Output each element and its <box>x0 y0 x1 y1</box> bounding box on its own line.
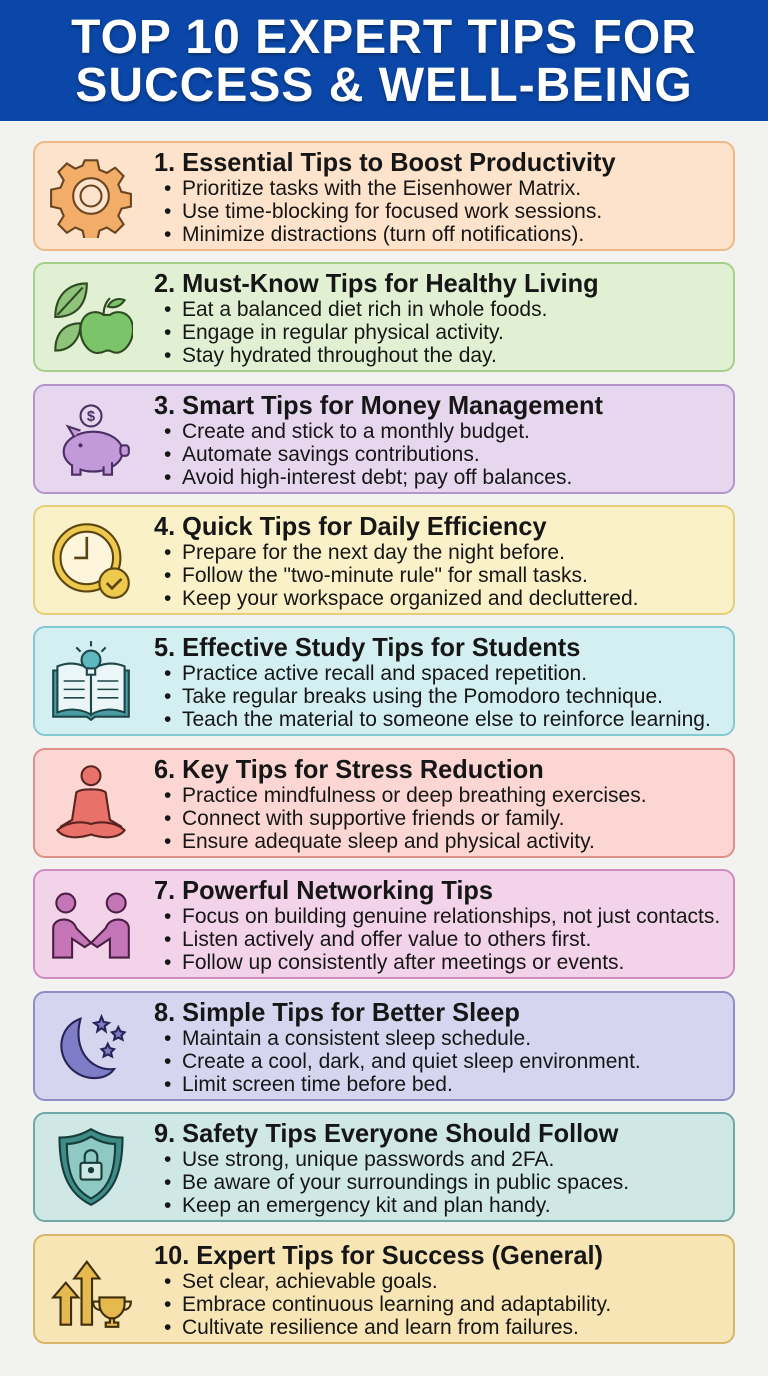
text: efficiency: • <box>164 541 171 564</box>
text: study: Take regular breaks using the Pomodoro technique. <box>182 685 663 708</box>
icon: clock with check <box>52 523 130 599</box>
text: efficiency: • <box>164 587 171 610</box>
text: money: 3. Smart Tips for Money Management <box>154 390 603 420</box>
text: sleep: Limit screen time before bed. <box>182 1073 453 1096</box>
text: efficiency <box>154 511 638 610</box>
text: healthy living: • <box>164 298 171 321</box>
text: networking: Focus on building genuine relationships, not just contacts. <box>182 905 720 928</box>
text: money: • <box>164 420 171 443</box>
panel: efficiency <box>33 505 735 615</box>
panel: safety <box>33 1112 735 1222</box>
panel: money <box>33 384 735 494</box>
text: study: 5. Effective Study Tips for Students <box>154 632 580 662</box>
panel: study <box>33 626 735 736</box>
panel: healthy living <box>33 262 735 372</box>
icon: piggy bank <box>62 404 130 476</box>
text: money <box>154 390 603 489</box>
text: stress: • <box>164 830 171 853</box>
icon: handshake people <box>52 892 130 959</box>
text: success: Set clear, achievable goals. <box>182 1270 438 1293</box>
text: safety: Use strong, unique passwords and 2FA. <box>182 1148 554 1171</box>
text: stress: Practice mindfulness or deep breathing exercises. <box>182 784 647 807</box>
text: efficiency: 4. Quick Tips for Daily Efficiency <box>154 511 547 541</box>
header: SUCCESS & WELL-BEING <box>75 59 693 112</box>
text: success: • <box>164 1270 171 1293</box>
text: safety: • <box>164 1171 171 1194</box>
text: efficiency: Follow the "two-minute rule" for small tasks. <box>182 564 588 587</box>
text: success: • <box>164 1293 171 1316</box>
text: productivity: Minimize distractions (turn off notifications). <box>182 223 584 246</box>
text: networking: Follow up consistently after meetings or events. <box>182 951 624 974</box>
text: stress: Ensure adequate sleep and physical activity. <box>182 830 595 853</box>
text: stress: 6. Key Tips for Stress Reduction <box>154 754 544 784</box>
text: sleep <box>154 997 641 1096</box>
panel: productivity <box>33 141 735 251</box>
icon: moon and stars <box>60 1014 127 1080</box>
text: healthy living: 2. Must-Know Tips for Healthy Living <box>154 268 599 298</box>
text: healthy living: Eat a balanced diet rich in whole foods. <box>182 298 547 321</box>
text: productivity: 1. Essential Tips to Boost Productivity <box>154 147 616 177</box>
text: healthy living: Stay hydrated throughout the day. <box>182 344 497 367</box>
text: safety: 9. Safety Tips Everyone Should Follow <box>154 1118 618 1148</box>
icon: apple and leaf <box>54 282 133 354</box>
text: sleep: Maintain a consistent sleep schedule. <box>182 1027 531 1050</box>
text: success: • <box>164 1316 171 1339</box>
text: productivity: • <box>164 223 171 246</box>
text: productivity: • <box>164 177 171 200</box>
text: safety <box>154 1118 629 1217</box>
text: productivity: • <box>164 200 171 223</box>
text: success <box>154 1240 611 1339</box>
text: productivity: Use time-blocking for focused work sessions. <box>182 200 602 223</box>
text: stress: • <box>164 807 171 830</box>
text: networking: • <box>164 905 171 928</box>
icon: gear <box>50 159 132 238</box>
text: productivity <box>154 147 616 246</box>
text: sleep: 8. Simple Tips for Better Sleep <box>154 997 520 1027</box>
text: stress: • <box>164 784 171 807</box>
text: study: Practice active recall and spaced repetition. <box>182 662 587 685</box>
text: healthy living <box>154 268 599 367</box>
text: success: Embrace continuous learning and adaptability. <box>182 1293 611 1316</box>
text: healthy living: • <box>164 344 171 367</box>
text: efficiency: Keep your workspace organized and decluttered. <box>182 587 638 610</box>
text: study <box>154 632 711 731</box>
panel: stress <box>33 748 735 858</box>
header: TOP 10 EXPERT TIPS FOR <box>71 11 697 64</box>
text: stress: Connect with supportive friends or family. <box>182 807 564 830</box>
text: sleep: • <box>164 1027 171 1050</box>
text: productivity: Prioritize tasks with the Eisenhower Matrix. <box>182 177 581 200</box>
header <box>0 0 768 121</box>
text: sleep: Create a cool, dark, and quiet sleep environment. <box>182 1050 641 1073</box>
text: networking: Listen actively and offer value to others first. <box>182 928 591 951</box>
text: stress <box>154 754 647 853</box>
text: success: 10. Expert Tips for Success (General) <box>154 1240 603 1270</box>
text: study: Teach the material to someone else to reinforce learning. <box>182 708 711 731</box>
text: safety: • <box>164 1194 171 1217</box>
panel: success <box>33 1234 735 1344</box>
text: money: • <box>164 443 171 466</box>
panel: networking <box>33 869 735 979</box>
text: networking <box>154 875 720 974</box>
icon: piggy bank: $ <box>87 409 95 425</box>
text: safety: Be aware of your surroundings in public spaces. <box>182 1171 629 1194</box>
text: efficiency: • <box>164 564 171 587</box>
text: networking: • <box>164 951 171 974</box>
text: study: • <box>164 685 171 708</box>
panel: sleep <box>33 991 735 1101</box>
icon: meditation <box>56 765 126 838</box>
text: money: • <box>164 466 171 489</box>
text: study: • <box>164 708 171 731</box>
text: efficiency: Prepare for the next day the night before. <box>182 541 565 564</box>
icon: arrows and trophy <box>51 1260 132 1328</box>
text: study: • <box>164 662 171 685</box>
text: money: Create and stick to a monthly budget. <box>182 420 530 443</box>
text: sleep: • <box>164 1073 171 1096</box>
icon: book with bulb <box>52 641 130 721</box>
text: safety: • <box>164 1148 171 1171</box>
text: networking: 7. Powerful Networking Tips <box>154 875 493 905</box>
text: money: Avoid high-interest debt; pay off balances. <box>182 466 572 489</box>
text: success: Cultivate resilience and learn from failures. <box>182 1316 579 1339</box>
text: healthy living: • <box>164 321 171 344</box>
icon: shield lock <box>58 1128 124 1206</box>
text: safety: Keep an emergency kit and plan handy. <box>182 1194 551 1217</box>
text: networking: • <box>164 928 171 951</box>
text: sleep: • <box>164 1050 171 1073</box>
text: money: Automate savings contributions. <box>182 443 480 466</box>
text: healthy living: Engage in regular physical activity. <box>182 321 504 344</box>
